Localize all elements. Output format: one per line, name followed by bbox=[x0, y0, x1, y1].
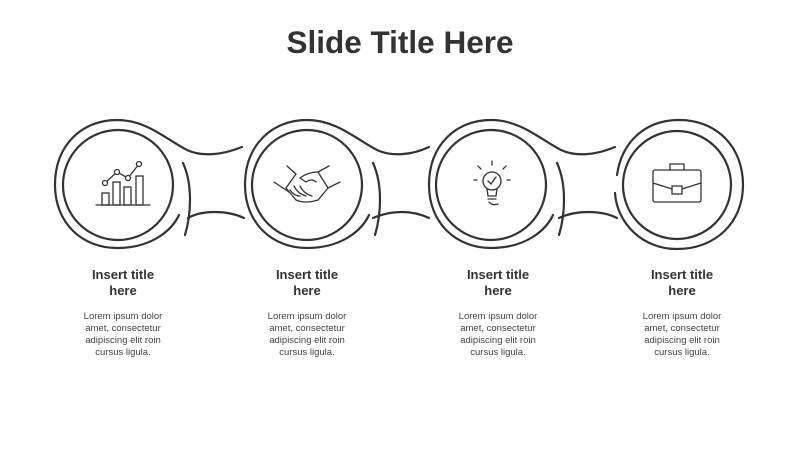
text: step 1: Lorem ipsum dolor bbox=[84, 311, 162, 322]
text: step 4: amet, consectetur bbox=[644, 323, 720, 334]
text: step 3: cursus ligula. bbox=[470, 347, 526, 358]
icon: chart bbox=[96, 162, 150, 205]
text: step 4: cursus ligula. bbox=[654, 347, 710, 358]
text: step 3: adipiscing elit roin bbox=[460, 335, 536, 346]
text: step 3: here bbox=[484, 283, 512, 298]
text: step 1: amet, consectetur bbox=[85, 323, 161, 334]
text: step 3 bbox=[459, 267, 538, 358]
text: step 4: Insert title bbox=[651, 267, 713, 282]
icon: briefcase bbox=[653, 164, 701, 202]
text: step 2 bbox=[268, 267, 346, 358]
title: Slide Title Here bbox=[286, 24, 514, 60]
text: step 1 bbox=[84, 267, 162, 358]
text: step 1: cursus ligula. bbox=[95, 347, 151, 358]
text: step 4: Lorem ipsum dolor bbox=[643, 311, 721, 322]
text: step 2: Lorem ipsum dolor bbox=[268, 311, 346, 322]
unit 4 bbox=[615, 120, 743, 249]
text: step 4: here bbox=[668, 283, 696, 298]
unit 1 bbox=[55, 120, 244, 248]
text: step 2: cursus ligula. bbox=[279, 347, 335, 358]
text: step 2: Insert title bbox=[276, 267, 338, 282]
text: step 2: here bbox=[293, 283, 321, 298]
text: step 4: adipiscing elit roin bbox=[644, 335, 720, 346]
text: step 1: adipiscing elit roin bbox=[85, 335, 161, 346]
text: step 1: Insert title bbox=[92, 267, 154, 282]
icon: bulb bbox=[474, 161, 510, 205]
icon: handshake bbox=[274, 166, 340, 202]
unit 2 bbox=[245, 120, 429, 248]
unit 3 bbox=[429, 120, 617, 248]
text: step 2: adipiscing elit roin bbox=[269, 335, 345, 346]
text: step 4 bbox=[643, 267, 722, 358]
text: step 3: Insert title bbox=[467, 267, 529, 282]
text: step 1: here bbox=[109, 283, 137, 298]
text: step 3: amet, consectetur bbox=[460, 323, 536, 334]
text: step 2: amet, consectetur bbox=[269, 323, 345, 334]
text: step 3: Lorem ipsum dolor bbox=[459, 311, 537, 322]
